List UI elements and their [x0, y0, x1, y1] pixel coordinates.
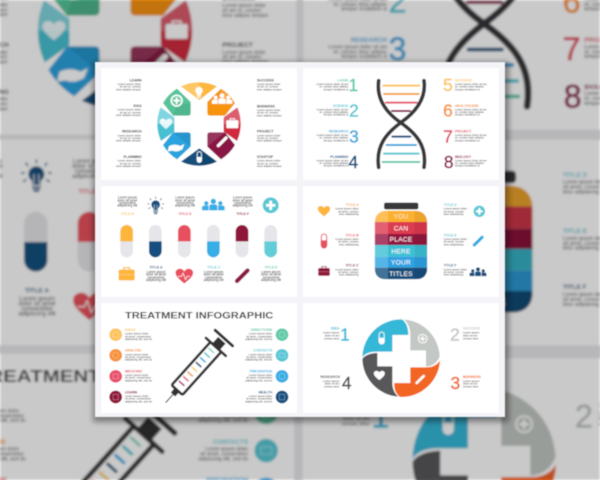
DNA strands: [378, 81, 425, 167]
text: title C: Lorem ipsum dolor: [335, 267, 359, 271]
text: title B: TITLE B: [345, 233, 359, 237]
text: health: sit amet, consectetur: [246, 397, 272, 401]
text: project: Lorem ipsum dolor: [257, 133, 280, 137]
text: title C: Lorem ipsum: [204, 270, 224, 274]
text: prevention: sit amet, consectetur: [246, 376, 272, 380]
icon: plus ring: [418, 334, 427, 343]
text: title F: tetur adipisicing: [444, 273, 464, 277]
panel: circular wheel: [101, 68, 297, 180]
jar lid: [384, 203, 418, 209]
text: business: BUSINESS: [463, 375, 481, 379]
icon: plus: [474, 206, 485, 217]
text: title D: TITLE D: [178, 212, 192, 216]
icon: heart: [374, 371, 385, 380]
text: title A: TITLE A: [149, 266, 163, 270]
text: planning: et, consec tetur adipisc: [319, 161, 349, 165]
text: title C: dolor sit amet: [204, 273, 224, 277]
icon circle: prevention: [276, 370, 288, 383]
text: science: et, consec tetur adipisc: [319, 110, 349, 114]
text: title A: sit amet, consec: [338, 209, 359, 213]
icon: pen: [472, 235, 484, 247]
text: planning: PLANNING: [123, 155, 142, 159]
text: title F: sit amet, consec: [444, 270, 465, 274]
text: title B: Lorem ipsum dolor: [335, 237, 359, 241]
number 7: 7: [443, 126, 453, 146]
text: login: Lorem ipsum dolor sit am: [317, 82, 349, 86]
text: learn: Lorem ipsum dolor: [125, 394, 148, 398]
text: learn: LEARN: [125, 390, 137, 394]
text: science: Lorem ipsum dolor sit am: [317, 107, 349, 111]
icon: briefcase: [226, 119, 238, 128]
text: project: PROJECT: [257, 130, 274, 134]
segment: dark: [362, 353, 398, 397]
text: success: dolor sit am: [463, 333, 478, 337]
jar label text: [389, 214, 413, 278]
text: directions: adipiscing elit, sed do: [245, 337, 273, 341]
segment: blue: [362, 319, 408, 357]
text: title F: adipiscing elit: [233, 204, 253, 208]
text: planning: Lorem ipsum dolor: [118, 159, 141, 163]
number 1: 1: [349, 75, 358, 95]
icon circle: directions: [276, 328, 288, 341]
text: idea: IDEA: [133, 104, 142, 108]
text: idea: dolor sit am: [325, 333, 340, 337]
text: title C: adipiscing elit: [204, 278, 224, 282]
text: title B: tetur adipisicing: [339, 242, 359, 246]
number 6: 6: [443, 101, 453, 121]
text: healthcare: tempor incididunt ut: [455, 113, 480, 117]
text: project: tetur adipisc tempor: [257, 139, 282, 143]
text: medicine: adipiscing elit, sed do: [125, 378, 152, 382]
text: research: RESEARCH: [122, 130, 142, 134]
text: title B: TITLE B: [121, 212, 134, 216]
text: ideas: IDEAS: [125, 328, 136, 332]
number 3: 3: [451, 373, 460, 393]
text: title D: tetur adipisicing: [444, 212, 464, 216]
text: health: HEALTH: [258, 390, 273, 394]
foreground card with six panels: [95, 62, 505, 417]
number 2: 2: [349, 101, 359, 121]
icon: lightbulb: [195, 87, 203, 98]
icon circle: learn: [109, 391, 122, 403]
text: title B: sit amet, consec: [338, 240, 359, 244]
panel: cross circle: [303, 303, 499, 413]
pill: maroon: [236, 225, 248, 257]
text: project: PROJECT: [455, 130, 472, 134]
text: title F: TITLE F: [444, 264, 456, 268]
text: idea: Lorem ipsum: [323, 331, 340, 335]
text: success: sit am et, consec: [257, 85, 279, 89]
panel: jar: [303, 186, 499, 297]
text: contacts: sit amet, consectetur: [246, 355, 272, 359]
text: research: RESEARCH: [320, 375, 340, 379]
icon: pill: [197, 152, 202, 163]
text: title E: adipiscing elit: [261, 278, 281, 282]
text: startup: Lorem ipsum dolor: [257, 159, 280, 163]
text: title B: adipiscing elit: [117, 204, 137, 208]
text: analyse: Lorem ipsum dolor: [125, 352, 148, 356]
icon: thermometer: [415, 374, 426, 385]
text: title F: TITLE F: [236, 212, 249, 216]
panel: treatment syringe: [101, 303, 297, 413]
text: title A: adipiscing elit: [146, 278, 166, 282]
text: business: Lorem ipsum: [463, 379, 480, 383]
text: project: et, consec tetur adipisc: [455, 136, 485, 140]
icon: plus ring: [171, 95, 182, 106]
text: title F: consectetur: [234, 201, 252, 205]
text: idea: Lorem ipsum dolor: [118, 108, 141, 112]
pill: blue: [207, 225, 220, 257]
icon circle: health: [276, 391, 288, 403]
icon: heart: [318, 206, 330, 216]
text: title C: TITLE C: [207, 266, 221, 270]
text: planning: tempor incididunt ut: [324, 164, 349, 168]
text: title C: sit amet, consec: [338, 270, 359, 274]
number 3: 3: [349, 126, 359, 146]
text: title A: dolor sit amet: [146, 273, 166, 277]
text: success: et, consec tetur adipisc: [455, 85, 485, 89]
text: analyse: sit amet, consectetur: [125, 355, 151, 359]
number 4: 4: [342, 373, 352, 393]
text: title E: consectetur: [262, 275, 280, 279]
icon: briefcase: [119, 268, 135, 280]
panel: DNA helix: [303, 68, 499, 180]
text: title E: dolor sit amet: [261, 273, 281, 277]
text: analyse: adipiscing elit, sed do: [125, 358, 152, 362]
segment: orange: [394, 360, 440, 397]
text: title C: tetur adipisicing: [339, 273, 359, 277]
text: title E: Lorem ipsum dolor: [444, 237, 467, 241]
text: business: sit am et, consec: [257, 111, 279, 115]
icon circle: contacts: [276, 349, 288, 362]
text: prevention: adipiscing elit, sed do: [245, 378, 273, 382]
text: title D: TITLE D: [444, 203, 457, 207]
number 8: 8: [444, 152, 453, 172]
text: login: et, consec tetur adipisc: [319, 85, 349, 89]
text: analyse: ANALYSE: [125, 349, 142, 353]
icon circle: ideas: [109, 328, 122, 341]
text: ideas: Lorem ipsum dolor: [125, 332, 148, 336]
text: success: Lorem ipsum dolor sit am: [455, 82, 487, 86]
text: title F: Lorem ipsum dolor: [444, 267, 467, 271]
icon: people: [202, 199, 225, 210]
text: research: Lorem ipsum: [323, 379, 340, 383]
text: research: tetur adipisc tempor: [116, 139, 141, 143]
text: title E: tetur adipisicing: [444, 242, 464, 246]
icon: heart: [160, 119, 172, 129]
card shadow: [93, 62, 509, 422]
text: title E: Lorem ipsum: [261, 270, 281, 274]
jar label text: CAN: [394, 225, 408, 232]
text: success: Lorem ipsum dolor: [257, 82, 280, 86]
icon: pill: [379, 332, 385, 344]
jar label text: PLACE: [390, 237, 413, 244]
icon: people: [212, 93, 232, 104]
text: medicine: Lorem ipsum dolor: [125, 373, 148, 377]
text: ideas: adipiscing elit, sed do: [125, 337, 152, 341]
text: business: Lorem ipsum dolor: [257, 108, 280, 112]
number 1: 1: [340, 324, 350, 344]
text: prevention: Lorem ipsum dolor: [249, 373, 272, 377]
text: research: sit am et, consec: [120, 136, 142, 140]
text: research: tempor incididunt ut: [324, 138, 349, 142]
text: research: Lorem ipsum dolor: [118, 133, 141, 137]
text: title A: TITLE A: [346, 203, 359, 207]
text: title A: consectetur: [147, 275, 165, 279]
number 5: 5: [443, 75, 453, 95]
text: business: consec tetur: [463, 385, 478, 389]
icon: handshake: [168, 144, 184, 151]
pill: yellow: [120, 225, 133, 257]
text: idea: tetur adipisc tempor: [116, 113, 141, 117]
icon: thermometer: [234, 267, 251, 284]
text: idea: sit am et, consec: [120, 110, 142, 114]
text: research: RESEARCH: [329, 130, 349, 134]
text: health: Lorem ipsum dolor: [249, 394, 272, 398]
jar body: [375, 211, 427, 279]
number 2: 2: [450, 324, 460, 344]
text: learn: sit am et, consec: [120, 85, 142, 89]
text: learn: Lorem ipsum dolor: [118, 82, 141, 86]
icon: people: [469, 267, 486, 276]
text: project: tempor incididunt ut: [455, 138, 480, 142]
icon: thermometer: [216, 136, 228, 148]
text: science: tempor incididunt ut: [324, 113, 349, 117]
text: title D: sit amet, consec: [444, 209, 465, 213]
text: research: dolor sit am: [325, 382, 340, 386]
text: success: SUCCESS: [463, 327, 481, 331]
text: healthcare: HEALTHCARE: [455, 104, 479, 108]
text: login: tempor incididunt ut: [324, 87, 349, 91]
text: planning: sit am et, consec: [120, 161, 142, 165]
text: title E: TITLE E: [444, 233, 457, 237]
text: login: LOGIN: [337, 79, 349, 83]
text: idea: consec tetur: [324, 336, 339, 340]
text: startup: tetur adipisc tempor: [257, 164, 282, 168]
text: business: dolor sit am: [463, 382, 478, 386]
text: ideas: sit amet, consectetur: [125, 334, 151, 338]
text: startup: STARTUP: [257, 155, 274, 159]
icon: bulb: [148, 197, 164, 214]
text: title D: consectetur: [176, 201, 194, 205]
icon: heart: [176, 269, 193, 284]
text: contacts: CONTACTS: [253, 349, 273, 353]
text: learn: adipiscing elit, sed do: [125, 399, 152, 403]
pill: teal: [264, 225, 277, 257]
text: health: adipiscing elit, sed do: [245, 399, 273, 403]
text: title F: Lorem ipsum: [233, 196, 253, 200]
text: research: consec tetur: [324, 385, 339, 389]
text: contacts: adipiscing elit, sed do: [245, 358, 273, 362]
text: success: consec tetur: [463, 336, 478, 340]
text: idea: IDEA: [331, 327, 340, 331]
pill: navy: [149, 225, 162, 257]
DNA rungs: [383, 86, 419, 162]
text: planning: tetur adipisc tempor: [116, 164, 141, 168]
text: title A: tetur adipisicing: [339, 212, 359, 216]
text: title B: consectetur: [119, 201, 137, 205]
text: business: tetur adipisc tempor: [257, 113, 282, 117]
text: business: BUSINESS: [257, 104, 275, 108]
icon circle: medicine: [109, 370, 122, 383]
text: biology: tempor incididunt ut: [455, 164, 480, 168]
text: biology: et, consec tetur adipisc: [455, 161, 485, 165]
text: project: sit am et, consec: [257, 136, 279, 140]
text: title A: Lorem ipsum dolor: [335, 207, 359, 211]
text: research: Lorem ipsum dolor sit am: [317, 133, 349, 137]
text: healthcare: Lorem ipsum dolor sit am: [455, 107, 487, 111]
jar label text: YOU: [394, 214, 408, 221]
text: title D: Lorem ipsum dolor: [444, 207, 467, 211]
text: planning: PLANNING: [330, 155, 349, 159]
pill: red: [178, 225, 191, 257]
text: directions: sit amet, consectetur: [246, 334, 272, 338]
text: title B: Lorem ipsum: [118, 196, 137, 200]
text: title C: consectetur: [205, 275, 223, 279]
segment: grey: [404, 319, 440, 366]
text: success: SUCCESS: [455, 79, 473, 83]
text: title D: Lorem ipsum: [175, 196, 195, 200]
syringe: [156, 329, 234, 412]
text: success: tempor incididunt ut: [455, 87, 480, 91]
wheel diagram: [157, 82, 241, 166]
icon: briefcase: [318, 267, 330, 276]
text: title D: adipiscing elit: [175, 204, 195, 208]
text: success: tetur adipisc tempor: [257, 87, 282, 91]
text: title E: sit amet, consec: [444, 240, 465, 244]
text: medicine: MEDICINE: [125, 369, 143, 373]
text: science: SCIENCE: [333, 104, 349, 108]
jar label text: HERE: [391, 248, 411, 255]
text: contacts: Lorem ipsum dolor: [249, 352, 272, 356]
text: title B: dolor sit amet: [117, 198, 137, 202]
text: title F: dolor sit amet: [233, 198, 253, 202]
text: medicine: sit amet, consectetur: [125, 376, 151, 380]
icon: plus: [263, 197, 279, 213]
text: biology: Lorem ipsum dolor sit am: [455, 158, 487, 162]
number 4: 4: [349, 152, 359, 172]
icon: pill: [321, 234, 327, 248]
text: healthcare: et, consec tetur adipisc: [455, 110, 485, 114]
text: learn: tetur adipisc tempor: [116, 87, 141, 91]
title: TREATMENT INFOGRAPHIC: [125, 310, 274, 320]
jar label text: TITLES: [389, 271, 413, 278]
text: title E: TITLE E: [265, 266, 278, 270]
text: research: et, consec tetur adipisc: [319, 136, 349, 140]
text: project: Lorem ipsum dolor sit am: [455, 133, 487, 137]
text: success: Lorem ipsum: [463, 331, 480, 335]
icon circle: analyse: [109, 349, 122, 362]
text: planning: Lorem ipsum dolor sit am: [317, 158, 349, 162]
text: success: SUCCESS: [257, 78, 275, 82]
jar label text: YOUR: [391, 260, 411, 267]
text: directions: DIRECTIONS: [251, 328, 273, 332]
text: startup: sit am et, consec: [257, 161, 279, 165]
text: learn: LEARN: [130, 78, 142, 82]
text: prevention: PREVENTION: [250, 369, 273, 373]
panel: pills: [101, 186, 297, 297]
text: title C: TITLE C: [345, 264, 359, 268]
text: learn: sit amet, consectetur: [125, 397, 151, 401]
text: title D: dolor sit amet: [175, 198, 195, 202]
text: directions: Lorem ipsum dolor: [249, 332, 272, 336]
text: title A: Lorem ipsum: [146, 270, 166, 274]
text: biology: BIOLOGY: [455, 155, 472, 159]
